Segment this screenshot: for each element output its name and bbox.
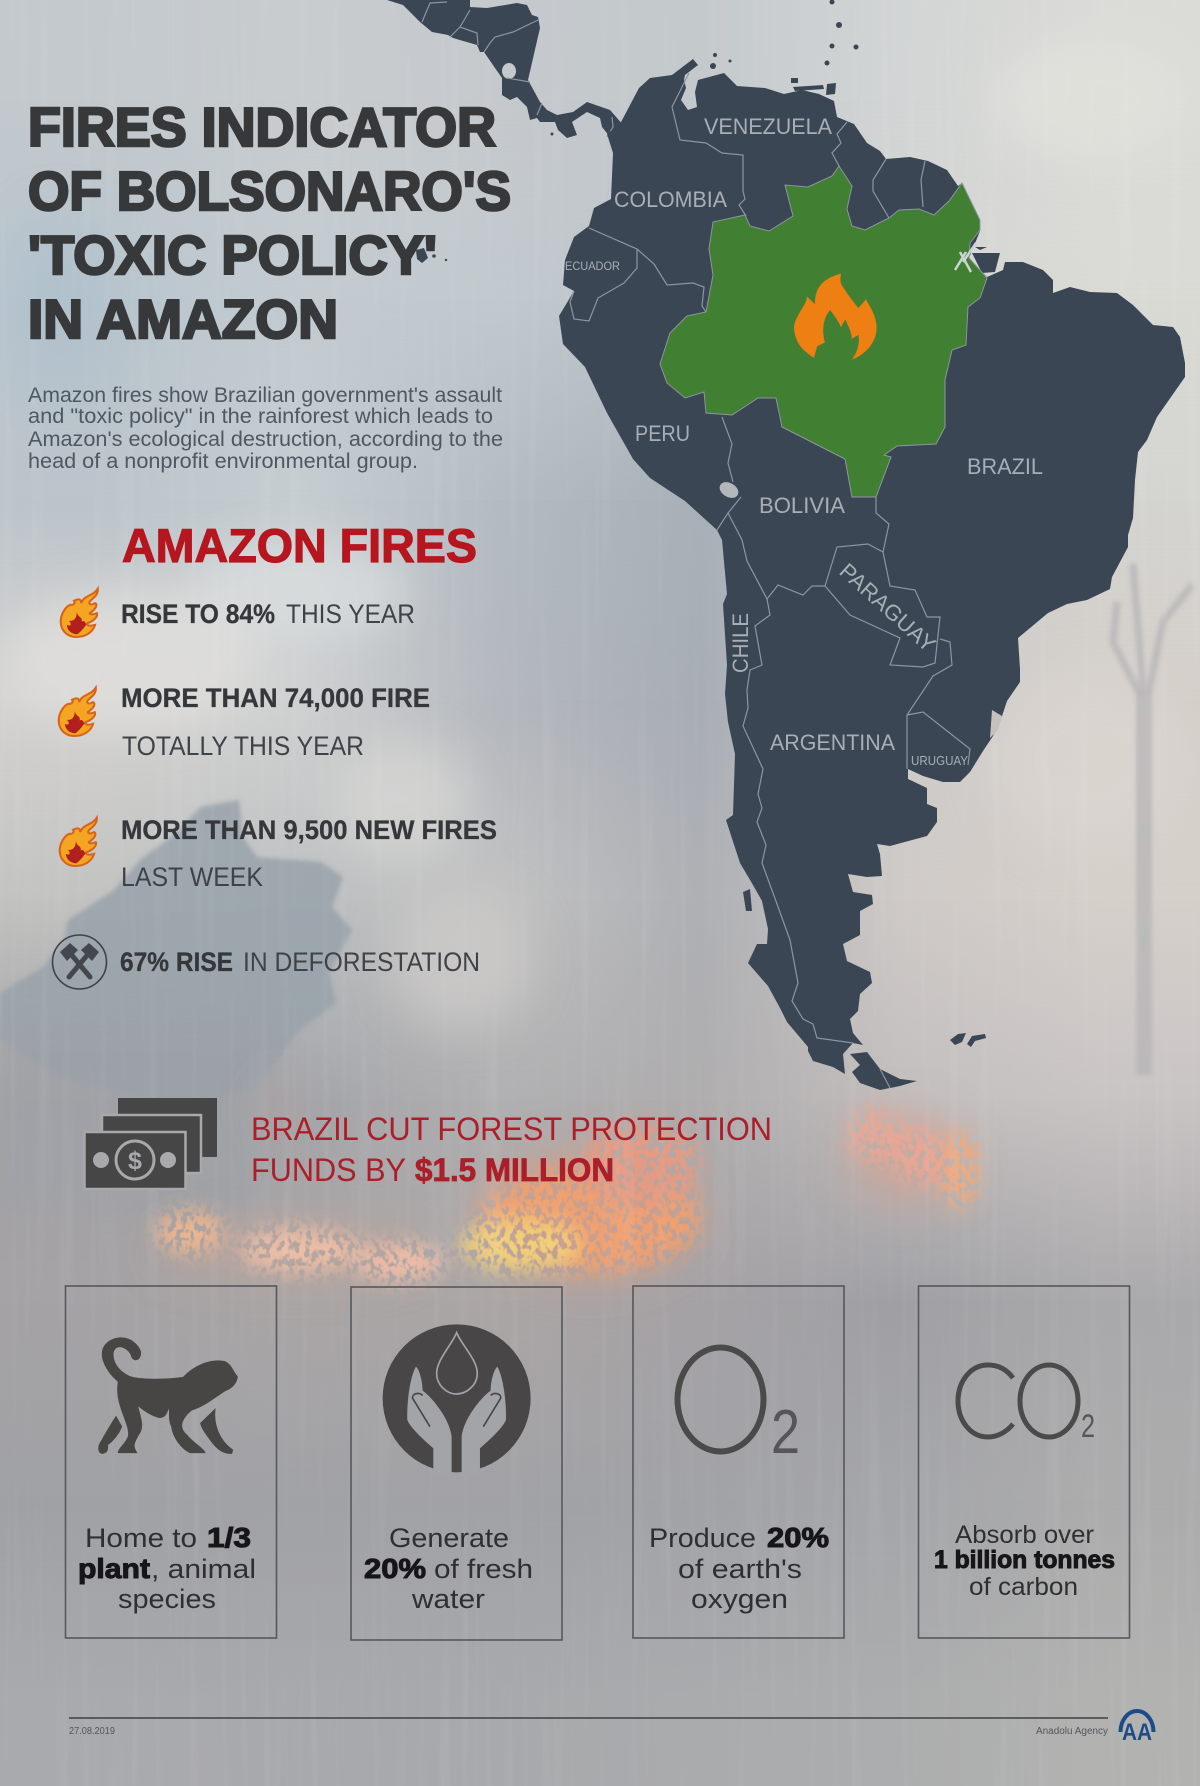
fire band xyxy=(156,1080,978,1282)
icon: banknotes xyxy=(84,1098,217,1189)
panel: fresh water: of fresh xyxy=(434,1554,533,1584)
islands xyxy=(416,0,1000,1090)
icon: O2 symbol xyxy=(678,1348,800,1467)
stat: 67% rise in deforestation: IN DEFORESTATION xyxy=(243,947,480,977)
intro text block: Amazon's ecological destruction, according to the xyxy=(28,428,503,451)
panel: species xyxy=(66,1286,276,1638)
country labels: PARAGUAY xyxy=(835,558,941,657)
logo: Anadolu Agency xyxy=(1120,1711,1154,1746)
footer: 27.08.2019 xyxy=(69,1726,115,1737)
stat: rise to 84% xyxy=(61,589,415,637)
stat: more than 9,500 new fires xyxy=(60,815,497,892)
country labels: PERU xyxy=(635,421,690,446)
lakes xyxy=(717,479,1002,738)
footer: Anadolu Agency xyxy=(1036,1726,1108,1737)
country labels: BRAZIL xyxy=(967,454,1043,479)
panel: carbon: Absorb over xyxy=(955,1521,1094,1549)
stat: more than 74,000 fire: MORE THAN 74,000 FIRE xyxy=(121,683,430,713)
panel: species: species xyxy=(118,1584,216,1614)
title xyxy=(28,96,511,350)
map of South America xyxy=(387,0,1185,1090)
icon: CO2 symbol: 2 xyxy=(1081,1408,1095,1444)
icon: crossed axes xyxy=(52,935,106,989)
panel: oxygen: 20% xyxy=(767,1522,829,1553)
stat: more than 9,500 new fires: LAST WEEK xyxy=(121,862,263,892)
panel: species: Home to xyxy=(85,1523,197,1553)
country labels: CHILE xyxy=(728,613,753,673)
icon: CO2 symbol xyxy=(958,1365,1095,1444)
intro text block: and "toxic policy" in the rainforest which leads to xyxy=(28,405,493,428)
Amazon region highlighted in green xyxy=(660,166,987,497)
icon: hands holding water drop xyxy=(383,1324,531,1477)
stat: rise to 84%: RISE TO 84% xyxy=(121,599,275,629)
funding callout: BRAZIL CUT FOREST PROTECTION xyxy=(251,1111,772,1147)
panel: oxygen: of earth's xyxy=(678,1554,802,1584)
title: OF BOLSONARO'S xyxy=(28,160,511,222)
stat: more than 74,000 fire xyxy=(59,683,430,761)
icon: flame xyxy=(59,688,96,736)
pale trunks xyxy=(460,564,1192,1075)
stat: 67% rise in deforestation: 67% RISE xyxy=(120,947,233,977)
stat: more than 9,500 new fires: MORE THAN 9,500 NEW FIRES xyxy=(121,815,497,845)
funding callout: FUNDS BY xyxy=(251,1152,406,1188)
panel: oxygen xyxy=(633,1286,844,1638)
panel: carbon: of carbon xyxy=(969,1573,1078,1601)
title: IN AMAZON xyxy=(28,288,338,350)
icon: flame xyxy=(61,589,98,637)
icon: flame xyxy=(60,818,97,866)
intro text block: Amazon fires show Brazilian government's assault xyxy=(28,384,502,407)
panel: fresh water xyxy=(351,1287,562,1640)
funding callout xyxy=(84,1098,772,1189)
intro text block: head of a nonprofit environmental group. xyxy=(28,450,418,473)
panel: species: 1/3 xyxy=(207,1522,251,1553)
stat: more than 74,000 fire: TOTALLY THIS YEAR xyxy=(122,731,364,761)
title: 'TOXIC POLICY' xyxy=(28,224,437,286)
country labels: ARGENTINA xyxy=(770,730,895,755)
intro text block xyxy=(28,384,503,473)
panel: carbon: 1 billion tonnes xyxy=(934,1546,1115,1574)
icon: monkey xyxy=(99,1338,237,1453)
tree silhouette in smoke xyxy=(0,800,352,1110)
footer xyxy=(69,1711,1154,1746)
icon: banknotes: $ xyxy=(128,1147,142,1175)
funding callout: $1.5 MILLION xyxy=(415,1152,614,1188)
Amazon river mouth xyxy=(955,243,976,272)
panel: oxygen: Produce xyxy=(649,1523,756,1553)
icon: O2 symbol: 2 xyxy=(771,1398,800,1467)
country labels: VENEZUELA xyxy=(704,114,832,139)
Central America xyxy=(387,0,624,150)
country labels: URUGUAY xyxy=(911,753,968,768)
panel: fresh water: water xyxy=(411,1584,485,1614)
stat: rise to 84%: THIS YEAR xyxy=(286,599,415,629)
country labels xyxy=(565,114,1043,768)
icon: central orange flame xyxy=(794,274,877,360)
panel: carbon xyxy=(918,1286,1130,1638)
panel: species: plant xyxy=(78,1553,150,1584)
title: FIRES INDICATOR xyxy=(28,96,496,158)
country labels: COLOMBIA xyxy=(614,187,727,212)
country labels: BOLIVIA xyxy=(759,493,845,518)
country borders xyxy=(570,73,970,1088)
panel: fresh water: 20% xyxy=(364,1553,426,1584)
continent landmass xyxy=(559,59,1185,1074)
panel: fresh water: Generate xyxy=(389,1523,509,1553)
heading: Amazon fires: AMAZON FIRES xyxy=(122,519,477,572)
logo: Anadolu Agency: AA xyxy=(1122,1719,1152,1746)
panel: oxygen: oxygen xyxy=(691,1584,788,1614)
country labels: ECUADOR xyxy=(565,259,620,273)
stat: 67% rise in deforestation xyxy=(52,935,480,989)
panel: species: , animal xyxy=(151,1554,256,1584)
